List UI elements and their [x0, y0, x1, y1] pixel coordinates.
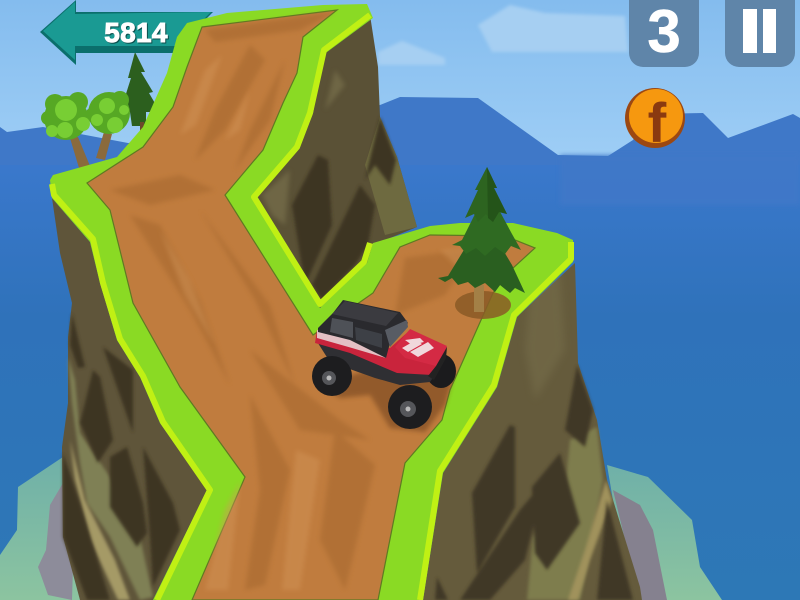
bright grass rim — [52, 15, 571, 600]
left shore rocks — [38, 483, 75, 600]
front right wheel — [388, 385, 432, 429]
score: 5814 — [104, 17, 168, 48]
sea — [0, 165, 800, 600]
left island shallows — [0, 457, 80, 600]
grass edge — [50, 4, 573, 600]
right shore rocks — [613, 490, 667, 600]
round tree foliage — [41, 91, 130, 140]
right cliff — [423, 263, 642, 600]
tree shadow — [455, 291, 511, 319]
level number: 3 — [647, 0, 681, 65]
back cliff — [257, 15, 417, 308]
side stripe — [317, 330, 386, 358]
truck — [312, 300, 456, 432]
pause button — [725, 0, 795, 67]
cabin — [318, 300, 408, 358]
truck shadow — [320, 360, 455, 432]
front left wheel — [312, 356, 352, 396]
grille — [428, 347, 447, 380]
chassis — [316, 340, 437, 385]
road streaks — [110, 12, 475, 590]
left cliff — [52, 198, 207, 600]
rear right wheel — [426, 354, 456, 388]
distant pine tree — [121, 52, 160, 134]
score arrow — [40, 0, 213, 65]
distant mountains — [0, 97, 800, 240]
pine tree near truck — [438, 167, 525, 312]
round tree trunks — [70, 132, 112, 168]
level counter — [629, 0, 699, 67]
hood graphic — [402, 338, 434, 357]
windows — [330, 318, 408, 348]
coin — [625, 88, 685, 154]
right island shallows — [607, 465, 722, 600]
body — [315, 330, 447, 375]
sky — [0, 0, 800, 170]
coin letter: f — [648, 91, 667, 154]
clouds — [378, 5, 628, 65]
road — [87, 10, 535, 600]
